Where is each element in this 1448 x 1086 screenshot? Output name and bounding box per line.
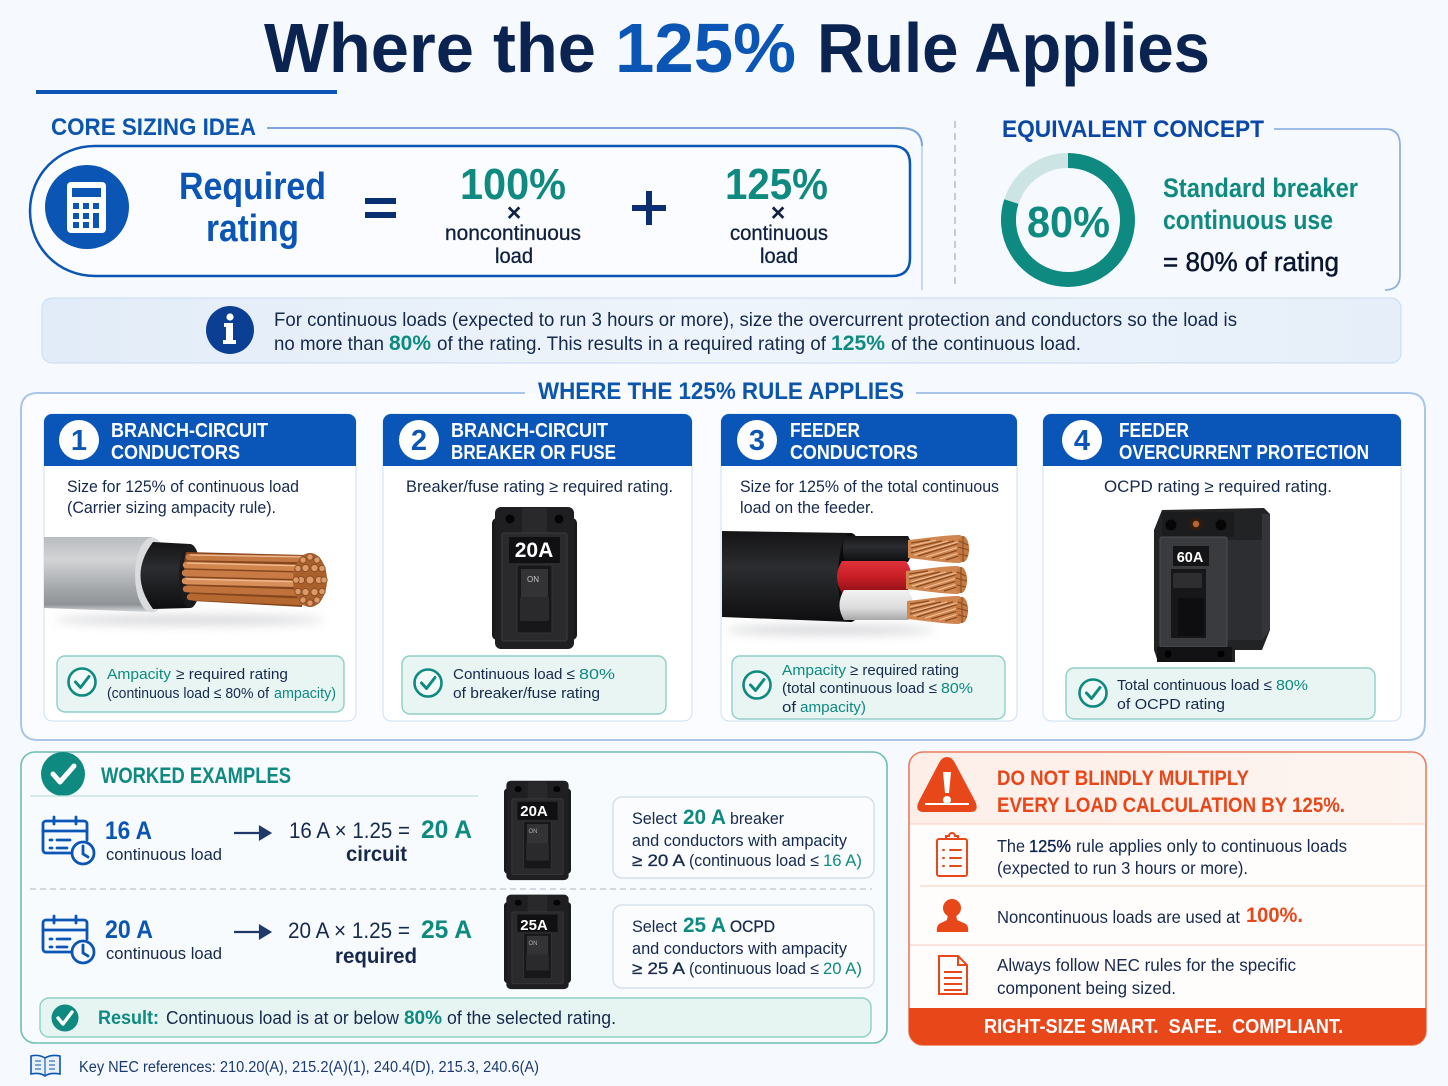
warning item: follow NEC: component being sized. (997, 978, 1176, 998)
check note: of OCPD rating (1117, 696, 1225, 713)
formula: continuous term: × (771, 199, 785, 227)
section: core sizing idea (30, 114, 922, 290)
heading: core sizing idea: CORE SIZING IDEA (51, 114, 256, 141)
example row: 20 A: 25 A (421, 916, 472, 944)
card 3: feeder conductors: CONDUCTORS (790, 442, 918, 464)
icon: calculator (45, 165, 129, 249)
warning item: continuous only: 125% (1029, 836, 1071, 856)
icon: calendar clock (43, 817, 94, 864)
card 1 description: Size for 125% of continuous load (67, 478, 299, 496)
warning footer banner (909, 1008, 1426, 1045)
warning heading: EVERY LOAD CALCULATION BY 125%. (997, 793, 1345, 817)
card 2: branch-circuit breaker or fuse: BRANCH-CIRCUIT (451, 420, 608, 442)
card 1: branch-circuit conductors (44, 414, 356, 721)
callout: select 25 A OCPD: OCPD (730, 918, 775, 936)
warning item: continuous only: (expected to run 3 hours or more). (997, 858, 1248, 878)
check note (57, 656, 344, 712)
formula: required rating (179, 166, 326, 250)
icon: large check badge (41, 752, 85, 796)
plus sign (632, 191, 666, 225)
check note (732, 656, 1005, 719)
card 3 description: Size for 125% of the total continuous (740, 478, 999, 496)
card 1 description (67, 478, 299, 517)
check note: 80% (941, 680, 973, 697)
heading: equivalent concept: EQUIVALENT CONCEPT (1002, 116, 1264, 143)
check note: ampacity) (274, 685, 336, 702)
icon: check (744, 672, 770, 698)
card 3 description (740, 478, 999, 517)
warning footer banner: RIGHT-SIZE SMART. SAFE. COMPLIANT. (984, 1016, 1343, 1038)
icon: person (937, 899, 968, 932)
icon: check (414, 670, 442, 696)
warning item: follow NEC (939, 955, 1296, 998)
formula: continuous term: load (760, 245, 798, 268)
result bar: Result: (98, 1008, 159, 1029)
arrow (234, 827, 270, 839)
heading: where the 125% rule applies: WHERE THE 125% RULE APPLIES (538, 378, 904, 405)
image: 20A breaker small: 20A (520, 803, 548, 820)
example row: 16 A: 16 A (105, 817, 152, 845)
example row: 16 A: 16 A × 1.25 = (289, 818, 410, 843)
warning heading (997, 766, 1345, 817)
icon: check (68, 668, 96, 696)
image: 60A breaker: 60A (1177, 550, 1204, 566)
donut chart: 80% (1008, 160, 1127, 280)
card 4 description: OCPD rating ≥ required rating. (1104, 478, 1332, 496)
check note: of breaker/fuse rating (453, 685, 600, 702)
equivalent text (1163, 173, 1358, 277)
panel: worked examples (21, 752, 887, 1043)
card 1: branch-circuit conductors: CONDUCTORS (111, 442, 240, 464)
formula: continuous term: continuous (730, 222, 828, 245)
example row: 16 A: continuous load (106, 846, 222, 864)
result bar (40, 998, 871, 1037)
formula: noncontinuous term: × (507, 199, 521, 227)
warning item: noncontinuous 100% (937, 899, 1303, 932)
footer references: Key NEC references: 210.20(A), 215.2(A)(1), 240.4(D), 215.3, 240.6(A) (79, 1059, 539, 1076)
callout: select 25 A OCPD: 25 A (683, 914, 726, 937)
warning item: follow NEC: Always follow NEC rules for the specific (997, 955, 1296, 975)
result bar: Continuous load is at or below (166, 1008, 400, 1028)
icon: open book (31, 1055, 60, 1076)
info text: no more than (274, 333, 384, 355)
example row: 16 A: circuit (346, 843, 407, 866)
example row: 16 A: 20 A (421, 816, 472, 844)
formula: continuous term: 125% (725, 160, 828, 209)
image: 20A breaker small (504, 781, 571, 880)
panel: where the 125% rule applies (21, 378, 1425, 740)
example row: 20 A: 20 A (105, 916, 153, 944)
warning item: continuous only: The (997, 836, 1025, 856)
callout: select 20 A breaker: ≥ 20 A (632, 852, 685, 870)
title (264, 9, 1210, 87)
donut chart: 80%: 80% (1027, 198, 1110, 247)
result bar: of the selected rating. (447, 1008, 616, 1028)
panel: warning (909, 752, 1426, 1045)
callout: select 25 A OCPD: Select (632, 918, 677, 936)
card 2: branch-circuit breaker or fuse: BREAKER OR FUSE (451, 442, 616, 464)
card 3: feeder conductors (721, 414, 1017, 721)
arrow (234, 926, 270, 938)
card 2: branch-circuit breaker or fuse: 2 (411, 425, 427, 457)
info text: 80% (389, 332, 431, 355)
card 3: feeder conductors: 3 (749, 425, 765, 457)
formula: continuous term (725, 160, 828, 268)
check note: Continuous load ≤ (453, 666, 575, 683)
card 3: feeder conductors: FEEDER (790, 420, 860, 442)
equivalent text: continuous use (1163, 205, 1333, 235)
warning heading: DO NOT BLINDLY MULTIPLY (997, 766, 1249, 790)
card 4: feeder overcurrent protection: 4 (1074, 425, 1090, 457)
callout: select 20 A breaker (613, 797, 874, 878)
info text (274, 309, 1237, 355)
equals sign (365, 198, 396, 218)
check note: ≥ required rating (850, 662, 959, 679)
example row: 20 A (43, 916, 472, 968)
equivalent text: = 80% of rating (1163, 247, 1339, 277)
image: three-conductor feeder cable (722, 531, 969, 635)
card 2 description: Breaker/fuse rating ≥ required rating. (406, 478, 673, 496)
info text: For continuous loads (expected to run 3 hours or more), size the overcurrent protection and conductors so the load is (274, 309, 1237, 331)
formula panel (30, 146, 910, 276)
info banner (42, 298, 1401, 363)
formula: required rating: Required (179, 166, 326, 208)
card 1: branch-circuit conductors: BRANCH-CIRCUIT (111, 420, 268, 442)
info text: of the rating. This results in a required rating of (437, 333, 827, 355)
check note: Ampacity (782, 662, 847, 679)
icon: check (1080, 680, 1106, 706)
formula: noncontinuous term: 100% (460, 160, 566, 209)
image: 25A breaker small: 25A (520, 917, 548, 934)
heading: worked examples: WORKED EXAMPLES (101, 763, 291, 788)
section: equivalent concept (1002, 116, 1400, 290)
title underline (36, 90, 337, 94)
check note: of (782, 699, 797, 716)
image: 20A breaker: 20A (515, 539, 553, 562)
image: 20A breaker (492, 507, 577, 649)
check note: 80% (579, 666, 615, 683)
example row: 20 A: required (335, 945, 417, 968)
callout: select 25 A OCPD: (continuous load ≤ (689, 960, 819, 978)
check note: (continuous load ≤ 80% of (107, 685, 270, 702)
check note (1066, 668, 1375, 719)
formula: noncontinuous term: load (495, 245, 533, 268)
callout: select 20 A breaker: 20 A (683, 806, 726, 829)
check note: Ampacity (107, 666, 172, 683)
icon: info (206, 306, 254, 354)
callout: select 20 A breaker: breaker (730, 810, 784, 828)
card 4: feeder overcurrent protection: FEEDER (1119, 420, 1189, 442)
formula: noncontinuous term: noncontinuous (445, 222, 581, 245)
warning item: continuous only (937, 833, 1347, 878)
equivalent text: Standard breaker (1163, 173, 1358, 203)
callout: select 20 A breaker: and conductors with ampacity (632, 832, 848, 850)
example row: 20 A: continuous load (106, 945, 222, 963)
card 3 description: load on the feeder. (740, 499, 874, 517)
icon: calendar clock (43, 916, 94, 963)
callout: select 20 A breaker: 16 A) (823, 852, 862, 870)
card 1: branch-circuit conductors: 1 (71, 425, 87, 457)
check note: ampacity) (800, 699, 866, 716)
info text: of the continuous load. (891, 333, 1081, 355)
icon: document (939, 956, 967, 994)
check note: 80% (1276, 677, 1308, 694)
check note: (total continuous load ≤ (782, 680, 937, 697)
image: 20A breaker: ON (527, 575, 539, 584)
warning item: noncontinuous 100%: Noncontinuous loads are used at (997, 907, 1240, 927)
card 2: branch-circuit breaker or fuse (383, 414, 692, 721)
image: 60A breaker (1154, 508, 1270, 662)
example row: 16 A (43, 816, 472, 866)
info text: 125% (831, 332, 885, 355)
check note: ≥ required rating (176, 666, 288, 683)
image: 25A breaker small: ON (528, 941, 538, 947)
callout: select 20 A breaker: (continuous load ≤ (689, 852, 819, 870)
formula: required rating: rating (206, 208, 299, 250)
image: 20A breaker small: ON (528, 829, 538, 835)
image: 25A breaker small (504, 895, 571, 989)
callout: select 25 A OCPD: ≥ 25 A (632, 960, 685, 978)
title: Where the (264, 9, 596, 87)
example row: 20 A: 20 A × 1.25 = (288, 918, 410, 943)
card 4: feeder overcurrent protection (1043, 414, 1401, 721)
check note (402, 656, 666, 714)
callout: select 25 A OCPD: and conductors with ampacity (632, 940, 848, 958)
result bar: 80% (404, 1008, 442, 1029)
warning item: continuous only: rule applies only to continuous loads (1076, 836, 1347, 856)
title: Rule Applies (817, 9, 1210, 87)
callout: select 25 A OCPD: 20 A) (823, 960, 862, 978)
card 1 description: (Carrier sizing ampacity rule). (67, 499, 276, 517)
warning item: noncontinuous 100%: 100%. (1246, 904, 1303, 927)
callout: select 25 A OCPD (613, 905, 874, 988)
formula: noncontinuous term (445, 160, 581, 268)
title: 125% (615, 9, 796, 87)
image: single conductor cable (44, 537, 327, 625)
card 4: feeder overcurrent protection: OVERCURRENT PROTECTION (1119, 442, 1369, 464)
check note: Total continuous load ≤ (1117, 677, 1272, 694)
icon: warning triangle (917, 757, 977, 812)
icon: clipboard (937, 833, 967, 876)
callout: select 20 A breaker: Select (632, 810, 677, 828)
